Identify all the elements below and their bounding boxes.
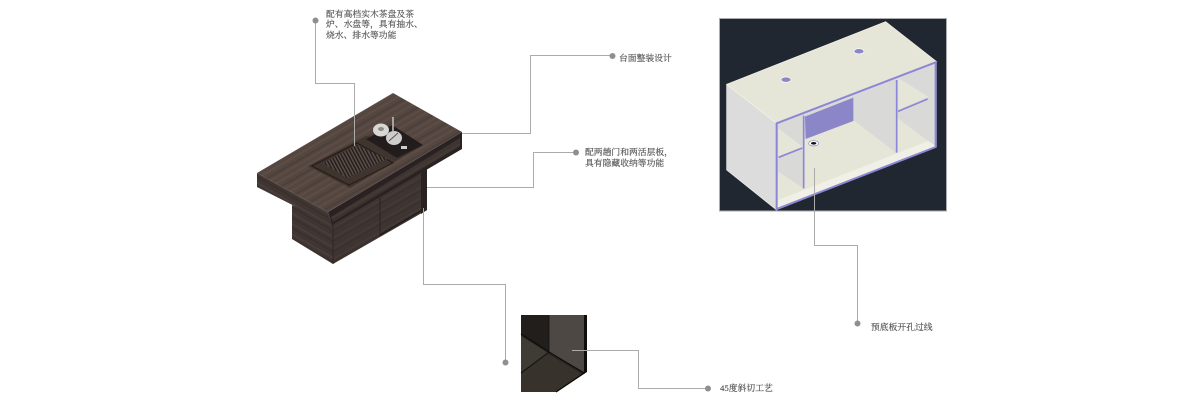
cabinet interior xyxy=(777,62,937,210)
cabinet top xyxy=(727,22,937,123)
label: integrated top: 台面整装设计 xyxy=(619,52,672,62)
recessed tray with grate xyxy=(308,136,423,188)
label: doors and shelves xyxy=(585,147,673,168)
label: tea tray features: 炉、水盘等，具有抽水、 xyxy=(326,19,423,29)
cabinet front frame xyxy=(777,62,936,209)
cable holes xyxy=(781,77,791,82)
interior shelves and dividers xyxy=(779,80,928,188)
callout lines xyxy=(316,20,858,388)
table top xyxy=(257,93,462,225)
label: tea tray features: 配有高档实木茶盘及茶 xyxy=(326,8,414,18)
label: tea tray features xyxy=(326,8,423,40)
label: doors and shelves: 配两趟门和两活层板， xyxy=(585,147,673,157)
tea table illustration xyxy=(257,93,462,264)
label: tea tray features: 烧水、排水等功能 xyxy=(326,30,396,40)
CAD cabinet model panel xyxy=(720,18,946,211)
label: cable hole: 预底板开孔过线 xyxy=(871,322,933,332)
label: bevel cut: 45度斜切工艺 xyxy=(720,383,773,393)
cabinet left side xyxy=(727,84,777,210)
table base xyxy=(292,165,427,264)
label: doors and shelves: 具有隐藏收纳等功能 xyxy=(585,158,664,168)
bevel cut detail image xyxy=(521,315,587,392)
callout dots xyxy=(312,18,860,392)
kettle plate and utensils xyxy=(366,117,423,158)
